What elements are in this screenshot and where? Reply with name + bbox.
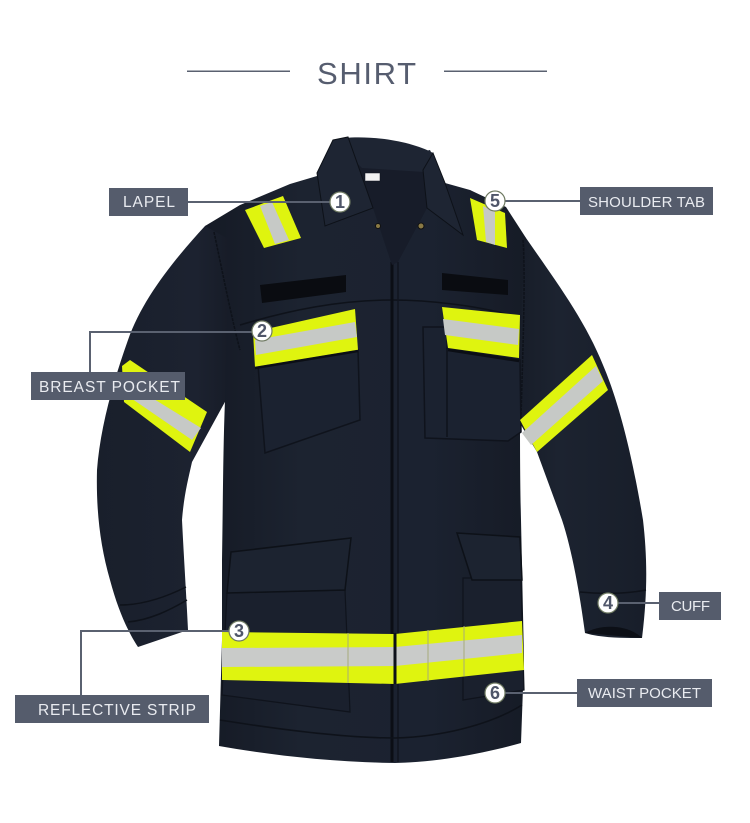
callout 4: cuff: CUFF bbox=[671, 598, 710, 615]
callout 6: waist pocket bbox=[485, 679, 712, 707]
left waist pocket bbox=[222, 590, 350, 712]
callout 3: reflective strip: 3 bbox=[234, 621, 244, 641]
callout 6: waist pocket: WAIST POCKET bbox=[588, 685, 701, 702]
callout 2: breast pocket: 2 bbox=[257, 321, 267, 341]
jacket illustration bbox=[97, 137, 646, 763]
callout 5: shoulder tab: SHOULDER TAB bbox=[588, 194, 705, 211]
right sleeve bbox=[470, 190, 646, 638]
sleeve seams bbox=[214, 232, 524, 420]
callout 5: shoulder tab bbox=[485, 187, 713, 215]
callout 2: breast pocket bbox=[31, 321, 272, 400]
callout 3: reflective strip: REFLECTIVE STRIP bbox=[38, 702, 196, 719]
callout 2: breast pocket: BREAST POCKET bbox=[39, 379, 181, 396]
callout 4: cuff: 4 bbox=[603, 593, 613, 613]
size label bbox=[365, 173, 380, 181]
left shoulder strip bbox=[245, 196, 301, 248]
left breast pocket bbox=[258, 350, 360, 453]
callout 1: lapel bbox=[109, 188, 350, 216]
right breast pocket bbox=[423, 327, 521, 441]
cuff right bbox=[580, 590, 646, 593]
jacket body bbox=[205, 150, 526, 763]
cuff left bbox=[120, 587, 187, 622]
hem bbox=[220, 705, 522, 738]
velcro right bbox=[442, 273, 508, 295]
callout 1: lapel: 1 bbox=[335, 192, 345, 212]
collar left bbox=[317, 137, 373, 226]
callout 6: waist pocket: 6 bbox=[490, 683, 500, 703]
collar right bbox=[423, 153, 463, 235]
left breast flap bbox=[253, 309, 358, 368]
velcro left bbox=[260, 275, 346, 303]
center placket bbox=[390, 262, 394, 762]
callout 5: shoulder tab: 5 bbox=[490, 191, 500, 211]
collar buttons bbox=[376, 223, 424, 229]
title: SHIRT bbox=[317, 56, 416, 91]
left sleeve band bbox=[122, 360, 207, 452]
callout 1: lapel: LAPEL bbox=[123, 194, 175, 211]
right waist flap bbox=[457, 533, 522, 580]
left sleeve bbox=[97, 208, 262, 647]
right sleeve band bbox=[520, 355, 608, 452]
right waist pocket bbox=[463, 578, 524, 700]
callout 3: reflective strip bbox=[15, 621, 249, 723]
right shoulder strip bbox=[470, 198, 507, 248]
collar interior bbox=[348, 150, 430, 265]
callout 4: cuff bbox=[598, 592, 721, 620]
waist reflective band bbox=[222, 621, 524, 684]
yoke seam bbox=[240, 300, 520, 325]
left waist flap bbox=[227, 538, 351, 593]
right breast flap bbox=[442, 307, 520, 361]
collar back bbox=[333, 137, 433, 172]
